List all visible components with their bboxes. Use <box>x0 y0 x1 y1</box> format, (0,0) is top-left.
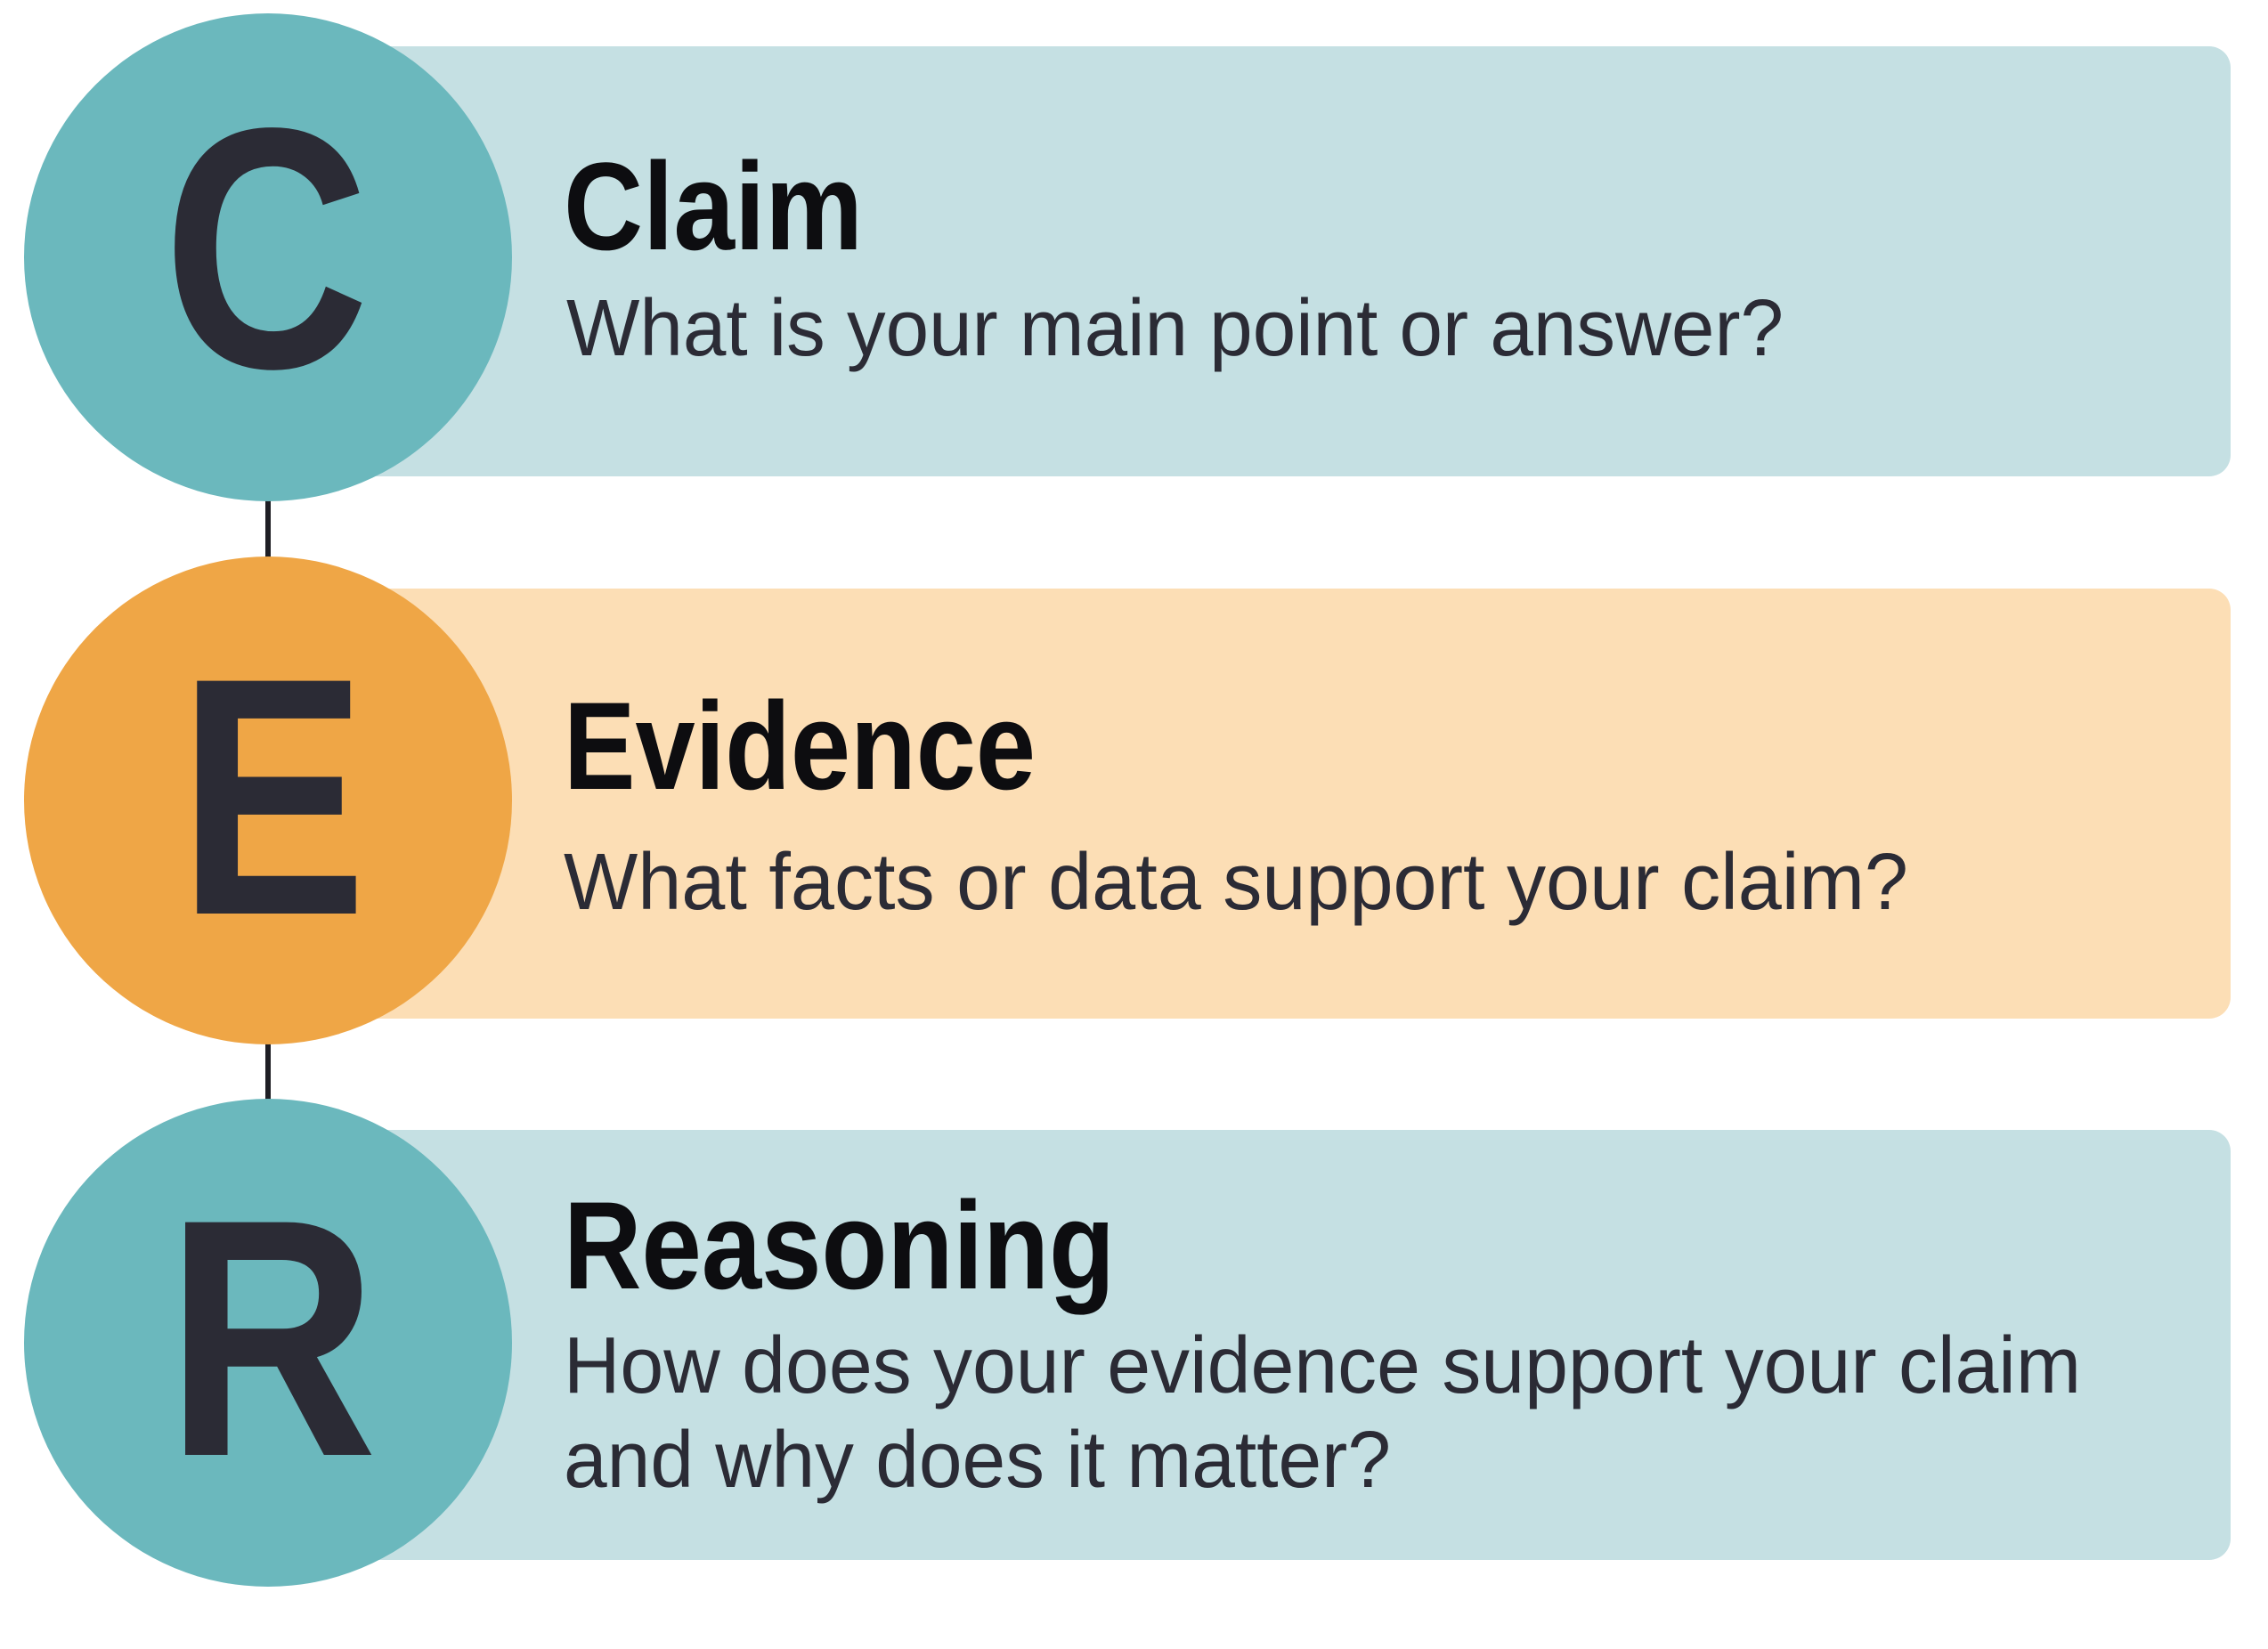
panel: claim <box>24 13 2231 501</box>
text: reasoning question: How does your evidence support your claim <box>564 1321 2081 1410</box>
text: claim question: What is your main point or answer? <box>566 284 1784 373</box>
connector: C to E <box>265 494 271 570</box>
text: reasoning question: and why does it matter? <box>564 1416 1391 1505</box>
icon: circle E <box>24 556 512 1044</box>
panel: reasoning <box>24 1099 2231 1587</box>
text: evidence question: What facts or data support your claim? <box>564 838 1908 927</box>
icon: circle R <box>24 1099 512 1587</box>
heading: Reasoning: Reasoning <box>564 1175 1115 1315</box>
text: reasoning question <box>564 1321 2081 1505</box>
icon: circle C: C <box>163 56 370 440</box>
icon: circle C <box>24 13 512 501</box>
panel: evidence <box>24 556 2231 1044</box>
icon: circle R: R <box>166 1149 378 1527</box>
heading: Evidence: Evidence <box>564 676 1036 816</box>
icon: circle E: E <box>178 607 367 986</box>
heading: Claim: Claim <box>564 136 863 276</box>
connector: E to R <box>265 1035 271 1110</box>
